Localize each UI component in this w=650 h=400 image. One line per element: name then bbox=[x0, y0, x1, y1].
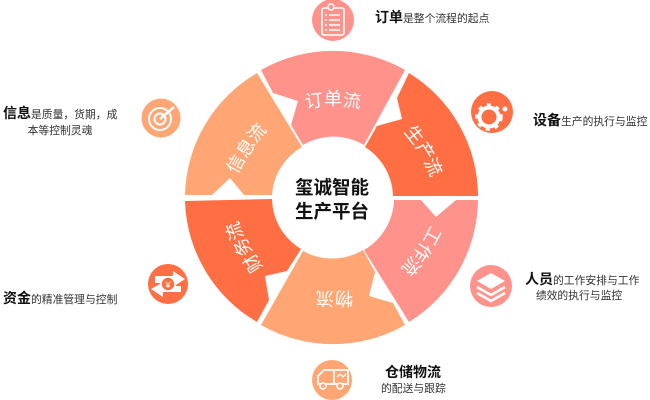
icon: truck bbox=[312, 360, 352, 400]
text: warehouse logistics: 仓储物流 bbox=[385, 364, 441, 380]
text: funds: 资金的精准管理与控制 bbox=[3, 290, 118, 306]
segment: order flow: 流 bbox=[342, 90, 362, 112]
segment: finance flow bbox=[185, 199, 301, 322]
icon: money transfer: ¥ bbox=[164, 280, 171, 290]
segment: production flow: 生 bbox=[401, 122, 427, 148]
segment: information flow: 信 bbox=[223, 151, 249, 177]
segment: production flow: 产 bbox=[412, 138, 438, 164]
icon: money transfer bbox=[148, 264, 188, 304]
segment: work flow: 作 bbox=[409, 239, 435, 265]
icon: target bbox=[142, 98, 180, 138]
segment: finance flow: 财 bbox=[240, 250, 266, 276]
text: information bbox=[3, 105, 118, 137]
segment: logistics flow bbox=[261, 250, 405, 344]
center title: 生产平台 bbox=[295, 201, 369, 222]
segment: finance flow: 务 bbox=[230, 235, 256, 259]
segment: order flow: 单 bbox=[324, 89, 342, 109]
text: information: 本等控制灵魂 bbox=[28, 123, 93, 137]
segment: logistics flow: 物 bbox=[335, 288, 353, 308]
icon: gear bbox=[471, 91, 513, 133]
segment: finance flow: 流 bbox=[223, 219, 247, 243]
text: order: 订单是整个流程的起点 bbox=[375, 9, 490, 25]
icon: layers bbox=[470, 265, 512, 307]
icon: clipboard bbox=[312, 0, 354, 41]
segment: work flow: 工 bbox=[419, 223, 445, 249]
segment: logistics flow: 流 bbox=[316, 288, 334, 308]
text: equipment: 设备生产的执行与监控 bbox=[533, 112, 648, 128]
segment: production flow: 流 bbox=[420, 155, 446, 179]
text: people: 绩效的执行与监控 bbox=[536, 288, 622, 302]
text: people: 人员的工作安排与工作 bbox=[525, 271, 640, 287]
segment: production flow bbox=[365, 73, 478, 196]
segment: information flow: 流 bbox=[244, 120, 270, 146]
segment: information flow bbox=[185, 73, 302, 195]
segment: order flow: 订 bbox=[304, 90, 324, 112]
center title: 玺诚智能 bbox=[295, 177, 369, 198]
ring diagram bbox=[185, 51, 478, 344]
text: warehouse logistics bbox=[381, 364, 446, 395]
center title bbox=[295, 177, 369, 222]
text: people bbox=[525, 271, 640, 302]
segment: work flow: 流 bbox=[398, 253, 424, 279]
segment: work flow bbox=[364, 200, 478, 322]
text: information: 信息是质量，货期，成 bbox=[3, 105, 118, 121]
segment: information flow: 息 bbox=[233, 135, 259, 161]
text: warehouse logistics: 的配送与跟踪 bbox=[381, 381, 446, 395]
segment: order flow bbox=[261, 51, 405, 145]
